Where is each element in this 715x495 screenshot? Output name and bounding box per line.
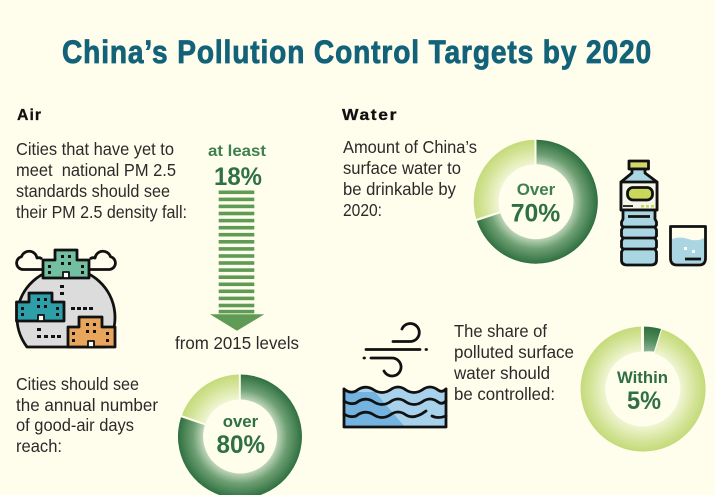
label: over: Over bbox=[517, 180, 556, 199]
text block: drinkable surface water: 2020: bbox=[343, 200, 382, 220]
text block: polluted surface water: The share of bbox=[454, 321, 547, 341]
text block: drinkable surface water: be drinkable by bbox=[343, 179, 456, 199]
icon: wind and water bbox=[344, 324, 446, 427]
heading: water: Water bbox=[342, 107, 398, 124]
label: over: over bbox=[223, 412, 259, 431]
text block: PM 2.5 target: their PM 2.5 density fall: bbox=[16, 202, 187, 222]
panel: water bbox=[342, 107, 706, 452]
chart: over 70% donut bbox=[474, 140, 598, 264]
icon: city on globe bbox=[16, 250, 115, 347]
text block: PM 2.5 target: meet national PM 2.5 bbox=[16, 160, 176, 180]
text block: good-air days: of good-air days bbox=[16, 415, 134, 435]
arrow: striped down arrow bbox=[210, 190, 264, 331]
text block: PM 2.5 target: standards should see bbox=[16, 181, 170, 201]
text block: polluted surface water: water should bbox=[453, 363, 550, 383]
chart: within 5% donut bbox=[581, 327, 706, 452]
chart: over 80% donut bbox=[178, 374, 302, 495]
text block: drinkable surface water: Amount of China’s bbox=[343, 137, 477, 157]
text block: good-air days: the annual number bbox=[16, 395, 158, 415]
text block: polluted surface water: polluted surface bbox=[454, 342, 574, 362]
label: within: Within bbox=[617, 368, 668, 387]
text: from 2015 levels: from 2015 levels bbox=[175, 333, 299, 353]
text block: PM 2.5 target: Cities that have yet to bbox=[16, 139, 174, 159]
icon: glass of water bbox=[670, 226, 706, 265]
number: 5%: 5% bbox=[627, 387, 661, 415]
text block: drinkable surface water: surface water to bbox=[343, 158, 461, 178]
panel: air bbox=[16, 107, 302, 495]
text block: good-air days: Cities should see bbox=[16, 374, 139, 394]
label: at least: at least bbox=[208, 143, 267, 160]
text block: good-air days bbox=[16, 374, 158, 456]
text block: polluted surface water: be controlled: bbox=[454, 384, 555, 404]
number: 80%: 80% bbox=[216, 431, 265, 459]
icon: water bottle bbox=[621, 161, 657, 265]
number: 18%: 18% bbox=[214, 163, 262, 191]
text block: good-air days: reach: bbox=[16, 436, 62, 456]
text block: polluted surface water bbox=[453, 321, 574, 404]
heading: air: Air bbox=[17, 107, 42, 124]
number: 70%: 70% bbox=[511, 200, 560, 228]
text block: drinkable surface water bbox=[343, 137, 477, 220]
title: China’s Pollution Control Targets by 2020 bbox=[62, 34, 652, 70]
text block: PM 2.5 target bbox=[16, 139, 187, 222]
